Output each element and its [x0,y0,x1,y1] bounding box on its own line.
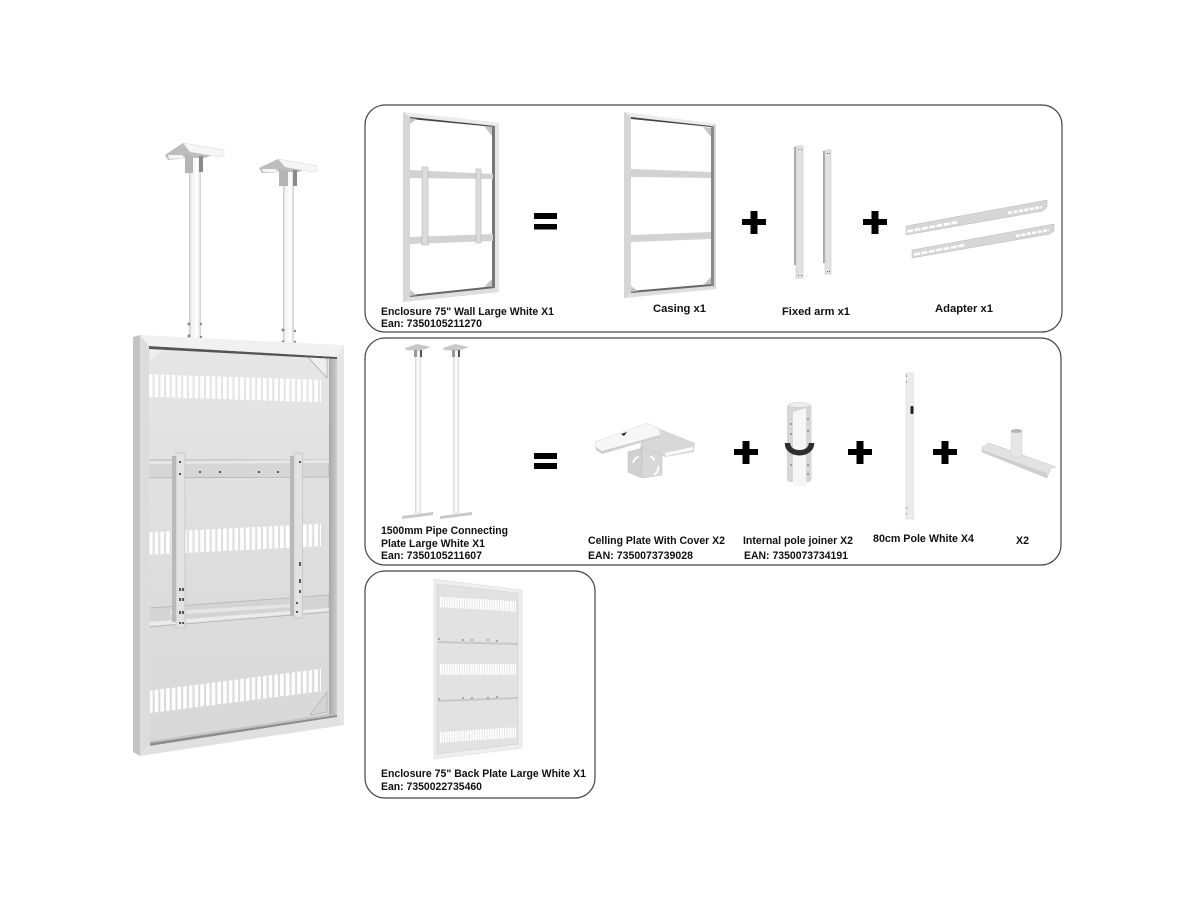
label: pipe connecting plate: 1500mm Pipe Connecting [381,525,508,537]
plus sign [734,441,758,464]
equals sign [534,213,557,230]
vertical mounting arms [172,453,302,628]
label: back plate: Enclosure 75" Back Plate Large White X1 [381,768,586,780]
label: X2: X2 [1016,535,1029,547]
plus sign [848,441,872,464]
label: wall enclosure EAN: Ean: 7350105211270 [381,318,482,330]
plus sign [863,211,887,234]
label: pole joiner: Internal pole joiner X2 [743,535,853,547]
label: 80cm pole: 80cm Pole White X4 [873,533,975,545]
right ceiling pole [259,159,317,344]
plus sign [933,441,957,464]
icon: casing [624,112,716,298]
label: ceiling plate: Celling Plate With Cover X2 [588,535,725,547]
label: back plate EAN: Ean: 7350022735460 [381,781,482,793]
icon: fixed arms [794,146,831,278]
label: pole joiner EAN: EAN: 7350073734191 [744,550,848,562]
label: casing: Casing x1 [653,303,706,315]
equals sign [534,453,557,469]
icon: internal pole joiner [787,402,812,486]
left ceiling pole [165,143,224,338]
enclosure back plate [149,346,337,745]
label: pipe EAN: Ean: 7350105211607 [381,550,482,562]
icon: pipes with plates [402,344,472,519]
plus sign [742,211,766,234]
icon: 80cm pole [906,373,914,519]
icon: adapter rails [906,200,1054,258]
panel: pipe connecting parts [365,338,1061,565]
label: plate large white: Plate Large White X1 [381,538,485,550]
icon: assembled wall enclosure frame [403,112,499,302]
label: ceiling plate EAN: EAN: 7350073739028 [588,550,693,562]
enclosure outer frame [133,335,344,756]
ventilation slots [149,385,321,702]
illustration: assembled ceiling-mounted enclosure [133,143,344,756]
icon: ceiling plate with cover [595,423,695,478]
inner walls and corners [149,346,337,746]
icon: T bracket [982,429,1056,478]
icon: back plate [434,579,522,759]
label: fixed arm: Fixed arm x1 [782,306,850,318]
panel: back plate [365,571,595,798]
mounting rails [149,460,329,627]
label: adapter: Adapter x1 [935,303,993,315]
panel: wall enclosure parts [365,105,1062,332]
label: wall enclosure: Enclosure 75" Wall Large White X1 [381,306,554,318]
